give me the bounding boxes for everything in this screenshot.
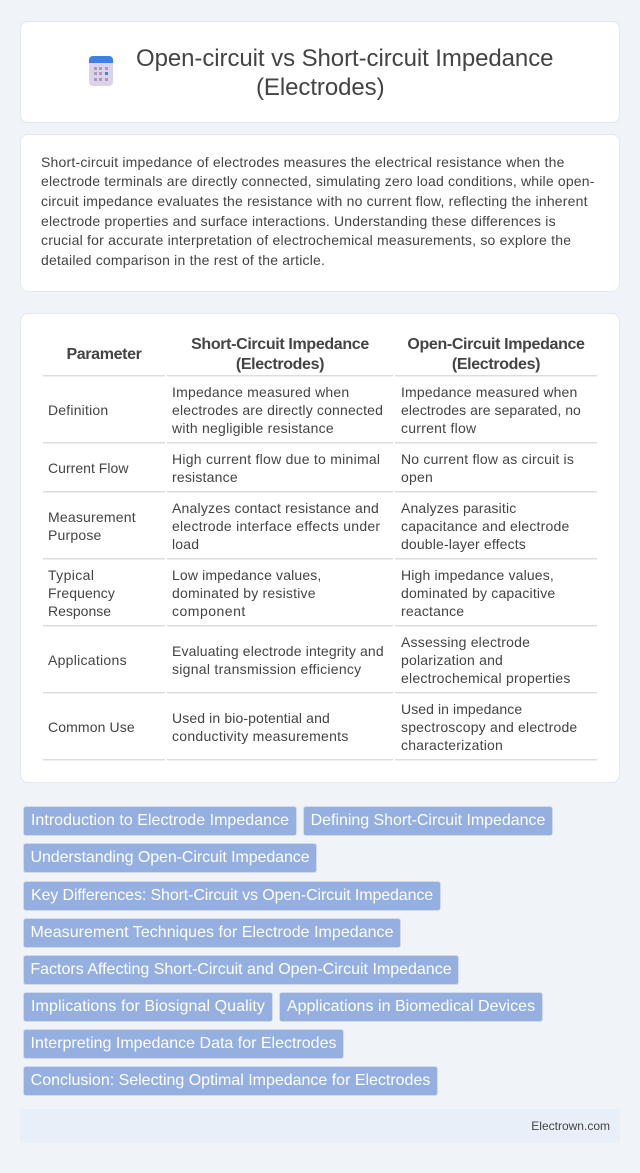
row: definition: current flow xyxy=(401,420,476,436)
row: typical frequency response xyxy=(43,567,597,627)
row: definition: with negligible resistance xyxy=(172,420,334,436)
topic tags xyxy=(23,806,553,1096)
table header xyxy=(43,336,597,377)
row: current flow: No current flow as circuit is xyxy=(401,451,574,467)
row: typical frequency response: component xyxy=(172,603,246,619)
tag: biomedical devices xyxy=(279,992,543,1022)
row: measurement purpose: Analyzes parasitic xyxy=(401,500,516,516)
tag: interpreting data: Interpreting Impedance Data for Electrodes xyxy=(31,1035,336,1052)
footer xyxy=(20,1109,620,1143)
tag: understanding open-circuit xyxy=(23,843,317,873)
row: applications: Applications xyxy=(48,652,127,668)
panel: title card xyxy=(20,21,620,123)
tag: biomedical devices: Applications in Biomedical Devices xyxy=(287,998,535,1015)
tag: understanding open-circuit: Understanding Open-Circuit Impedance xyxy=(30,849,310,866)
row: common use: Used in impedance xyxy=(401,701,522,717)
summary text xyxy=(41,154,595,268)
row: typical frequency response: reactance xyxy=(401,603,464,619)
row: applications: electrochemical properties xyxy=(401,670,571,686)
row: common use xyxy=(43,701,597,761)
row: definition: Impedance measured when xyxy=(172,384,349,400)
row: applications: polarization and xyxy=(401,652,503,668)
tag: defining short-circuit: Defining Short-Circuit Impedance xyxy=(311,812,545,829)
row: current flow xyxy=(43,451,597,493)
row: measurement purpose: capacitance and electrode xyxy=(401,518,569,534)
tag: measurement techniques xyxy=(23,918,401,948)
row: typical frequency response: Typical xyxy=(48,567,94,583)
tag: introduction xyxy=(23,806,297,836)
row: common use: conductivity measurements xyxy=(172,728,349,744)
row: definition: Impedance measured when xyxy=(401,384,577,400)
title: (Electrodes) xyxy=(256,74,385,101)
row: typical frequency response: High impedance values, xyxy=(401,567,554,583)
row: measurement purpose xyxy=(43,500,597,560)
panel: summary card xyxy=(20,134,620,292)
row: common use: spectroscopy and electrode xyxy=(401,719,577,735)
panel: comparison table xyxy=(20,313,620,783)
tag: measurement techniques: Measurement Techniques for Electrode Impedance xyxy=(30,924,394,941)
row: measurement purpose: Purpose xyxy=(48,527,102,543)
row: common use: characterization xyxy=(401,737,503,753)
title: Open-circuit vs Short-circuit Impedance xyxy=(136,45,553,72)
row: applications xyxy=(43,634,597,694)
row: common use: Common Use xyxy=(48,719,135,735)
row: typical frequency response: dominated by resistive xyxy=(172,585,316,601)
row: current flow: open xyxy=(401,469,433,485)
title xyxy=(136,45,553,101)
row: common use: Used in bio-potential and xyxy=(172,710,330,726)
summary text: electrode terminals are directly connected, simulating zero load conditions, while open- xyxy=(41,173,595,189)
row: measurement purpose: double-layer effects xyxy=(401,536,526,552)
row: definition xyxy=(43,384,597,444)
tag: defining short-circuit xyxy=(303,806,553,836)
row: definition: electrodes are directly connected xyxy=(172,402,383,418)
row: definition: Definition xyxy=(48,402,108,418)
tag: factors: Factors Affecting Short-Circuit and Open-Circuit Impedance xyxy=(30,961,452,978)
icon: calendar xyxy=(89,56,113,86)
row: measurement purpose: Measurement xyxy=(48,509,136,525)
summary text: crucial for accurate interpretation of electrochemical measurements, so explore the xyxy=(41,232,571,248)
tag: factors xyxy=(23,955,459,985)
row: current flow: High current flow due to minimal xyxy=(172,451,380,467)
row: measurement purpose: electrode interface effects under xyxy=(172,518,380,534)
row: current flow: resistance xyxy=(172,469,238,485)
row: measurement purpose: Analyzes contact resistance and xyxy=(172,500,379,516)
row: measurement purpose: load xyxy=(172,536,199,552)
summary text: Short-circuit impedance of electrodes measures the electrical resistance when the xyxy=(41,154,565,170)
row: applications: Evaluating electrode integrity and xyxy=(172,643,384,659)
tag: conclusion xyxy=(23,1066,438,1096)
summary text: circuit impedance evaluates the resistance with no current flow, reflecting the inherent xyxy=(41,193,588,209)
tag: interpreting data xyxy=(23,1029,344,1059)
tag: conclusion: Conclusion: Selecting Optimal Impedance for Electrodes xyxy=(31,1072,430,1089)
row: current flow: Current Flow xyxy=(48,460,128,476)
row: applications: signal transmission efficiency xyxy=(172,661,361,677)
table header: Parameter xyxy=(66,346,142,363)
row: definition: electrodes are separated, no xyxy=(401,402,581,418)
summary text: electrode properties and surface interactions. Understanding these differences is xyxy=(41,213,556,229)
tag: introduction: Introduction to Electrode Impedance xyxy=(31,812,289,829)
row: applications: Assessing electrode xyxy=(401,634,530,650)
row: typical frequency response: dominated by capacitive xyxy=(401,585,555,601)
row: typical frequency response: Frequency xyxy=(48,585,115,601)
table header: (Electrodes) xyxy=(452,356,540,373)
summary text: detailed comparison in the rest of the article. xyxy=(41,252,325,268)
tag: biosignal quality xyxy=(23,992,273,1022)
footer credit: Electrown.com xyxy=(531,1119,610,1133)
row: typical frequency response: Response xyxy=(48,603,111,619)
table header: (Electrodes) xyxy=(236,356,324,373)
row: typical frequency response: Low impedance values, xyxy=(172,567,321,583)
table header: Short-Circuit Impedance xyxy=(191,336,369,353)
tag: key differences: Key Differences: Short-Circuit vs Open-Circuit Impedance xyxy=(31,887,433,904)
tag: biosignal quality: Implications for Biosignal Quality xyxy=(31,998,265,1015)
table header: Open-Circuit Impedance xyxy=(407,336,585,353)
tag: key differences xyxy=(23,881,441,911)
